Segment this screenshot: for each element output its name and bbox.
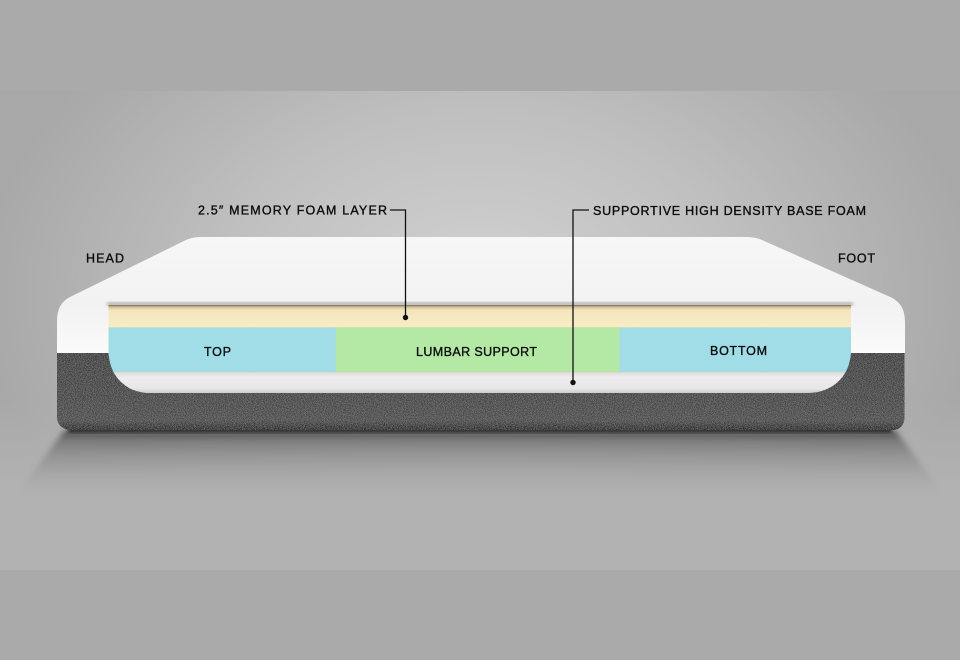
bottom zone [620, 328, 852, 372]
label: head: HEAD [86, 252, 124, 266]
cover seam shadow above cut-out [107, 302, 853, 306]
leader: base foam [570, 210, 589, 385]
label: lumbar support: LUMBAR SUPPORT [416, 345, 537, 359]
mattress [57, 237, 905, 430]
white cover [57, 237, 905, 353]
mattress floor shadow [12, 427, 948, 500]
label: foot: FOOT [838, 252, 875, 266]
memory foam layer [108, 305, 852, 328]
label: top: TOP [204, 345, 231, 359]
top zone [108, 328, 336, 372]
label: bottom: BOTTOM [710, 344, 767, 358]
leader: memory foam [390, 210, 408, 320]
cover edge line [851, 352, 904, 353]
grey fabric base [57, 353, 904, 430]
floor [0, 400, 960, 570]
label: memory foam: 2.5″ MEMORY FOAM LAYER [198, 204, 387, 218]
base foam layer [108, 371, 852, 393]
background spotlight wall [0, 91, 960, 570]
background bottom band [0, 570, 960, 660]
foam cut-away [108, 305, 852, 393]
lumbar support zone [336, 328, 620, 372]
label: base foam: SUPPORTIVE HIGH DENSITY BASE FOAM [593, 204, 866, 218]
background top band [0, 0, 960, 91]
